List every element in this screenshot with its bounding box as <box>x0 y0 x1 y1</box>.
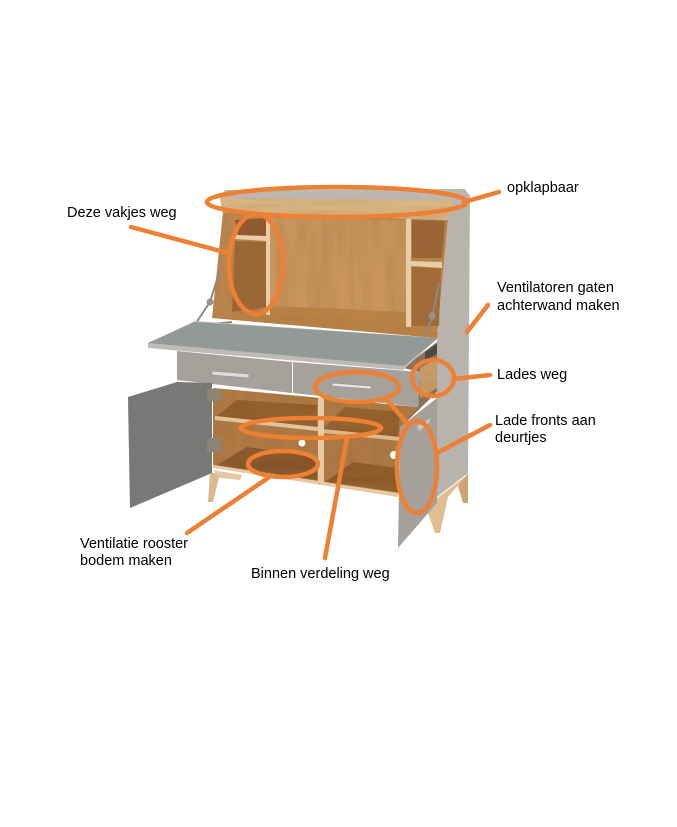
fold-down flap <box>148 321 438 370</box>
cabinet illustration <box>128 189 470 548</box>
label: Ventilatoren gaten: achterwand maken <box>497 298 620 314</box>
lower interior <box>213 388 418 497</box>
annotation: top flap <box>207 187 499 217</box>
open side drawer <box>400 342 437 428</box>
left door <box>128 382 221 508</box>
wooden underside strip <box>220 198 453 220</box>
annotation: bottom ventilation <box>187 451 318 533</box>
label: opklapbaar: opklapbaar <box>507 180 579 196</box>
label: Lades weg: Lades weg <box>497 367 567 383</box>
annotation: drawer front to door <box>315 372 490 513</box>
right hinge arm <box>421 283 439 344</box>
annotation: ventilation back wall <box>467 305 488 332</box>
shelves and dividers upper <box>235 212 442 327</box>
left hinge arm <box>194 270 232 326</box>
label: Ventilatoren gaten: Ventilatoren gaten <box>497 280 614 296</box>
left drawer <box>177 351 292 393</box>
upper interior <box>212 212 448 338</box>
label: Deze vakjes weg: Deze vakjes weg <box>67 205 177 221</box>
upper carcass top <box>220 189 470 202</box>
label: Lade fronts aan deurtjes: deurtjes <box>495 430 547 446</box>
label: Binnen verdeling weg: Binnen verdeling weg <box>251 566 390 582</box>
right side panel <box>437 195 470 497</box>
annotation: compartments <box>131 214 283 314</box>
right door <box>398 398 437 548</box>
label: Ventilatie rooster: Ventilatie rooster <box>80 536 188 552</box>
back and side legs <box>208 470 468 533</box>
label: Lade fronts aan deurtjes: Lade fronts aan <box>495 413 596 429</box>
annotation: inner divider <box>241 418 381 558</box>
annotation: side drawer <box>412 360 490 396</box>
right drawer <box>293 362 420 407</box>
label: Ventilatie rooster: bodem maken <box>80 553 172 569</box>
